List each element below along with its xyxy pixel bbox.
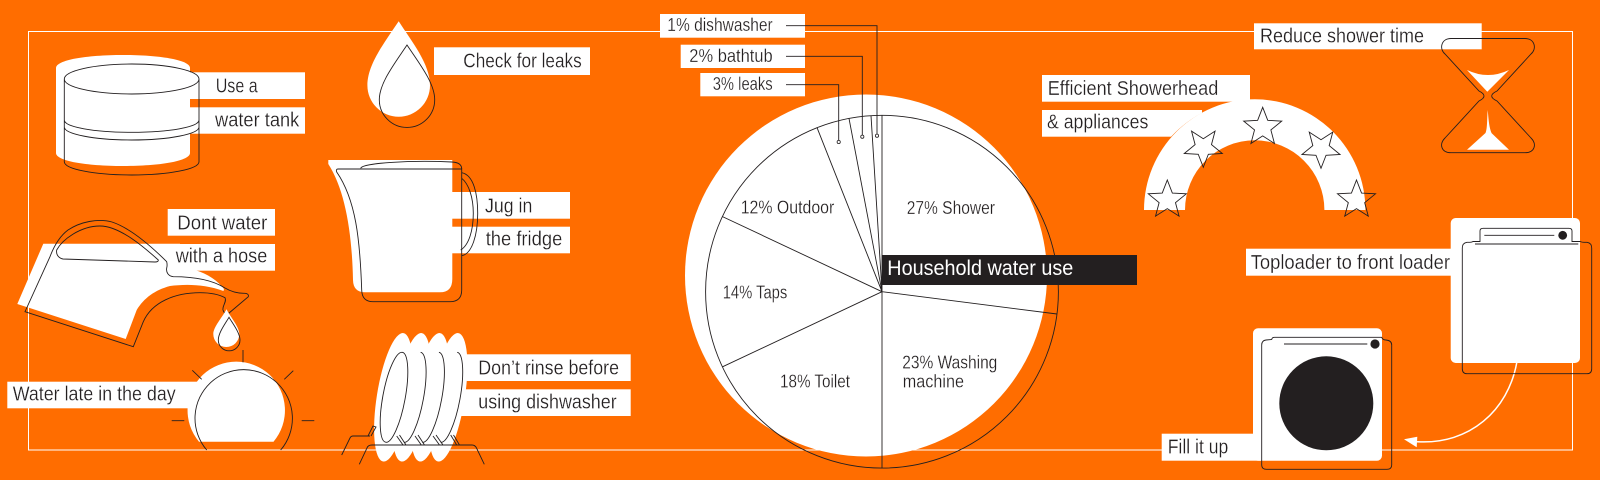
label: 27% shower: 27% Shower [907,198,995,218]
callout: 3% leaks [700,73,840,144]
label: use a: Use a [216,75,258,97]
title: household water use [882,255,1137,285]
callout: 3% leaks: 3% leaks [713,74,773,94]
label: 23% washing machine: machine [903,372,964,392]
label: appliances: & appliances [1047,111,1148,133]
icon: front-loading washer [1253,328,1392,469]
label: jug in: Jug in [485,195,532,217]
panel: check for leaks [367,21,590,127]
label: 12% outdoor: 12% Outdoor [741,197,834,217]
panel: jug in the fridge [328,160,570,302]
label: fill it up [1162,434,1262,461]
label: with a hose: with a hose [175,245,267,267]
pie outline and slices [706,115,1058,468]
label: water tank [190,107,305,134]
icon: plate outlines [375,350,468,444]
label: fill it up: Fill it up [1168,436,1228,458]
label: reduce shower time [1254,23,1482,49]
panel: water tank [56,55,305,175]
label: appliances [1042,110,1202,137]
panel: sun [7,350,314,450]
panel: fill it up [1162,328,1392,469]
panel: toploader to front loader [1246,218,1592,447]
icon: water tank [56,55,199,175]
callout: 1% dishwasher: 1% dishwasher [667,15,773,35]
icon: hourglass [1442,38,1534,153]
icon: five stars [1148,107,1376,216]
icon: water drop [367,21,435,127]
icon: sun [172,350,314,450]
label: 23% washing machine: 23% Washing [902,352,997,372]
label: dont water: Dont water [177,212,268,234]
label: efficient showerhead: Efficient Showerhead [1048,78,1218,100]
label: reduce shower time: Reduce shower time [1260,26,1424,48]
label: jug in [452,192,570,219]
panel: dishes [342,331,631,464]
panel: watering can [17,209,275,351]
icon: dish rack [342,426,484,464]
title: household water use: Household water use [887,257,1073,280]
callout: 2% bathtub: 2% bathtub [689,46,773,66]
icon: jug [328,160,478,302]
icon: small water drop [213,309,240,351]
label: 18% toilet: 18% Toilet [780,372,850,392]
label: toploader to front loader: Toploader to front loader [1251,252,1450,274]
label: the fridge [452,227,570,253]
pie chart: household water use [660,14,1137,468]
label: water late in the day: Water late in the day [13,384,176,406]
label: check for leaks [434,47,590,75]
icon: rainbow arch [1141,99,1368,210]
callout: 2% bathtub [681,45,864,138]
label: use a [190,72,305,99]
icon: watering can [17,220,248,347]
label: 14% taps: 14% Taps [723,282,787,302]
arrow: toploader to front loader [1404,363,1517,447]
icon: top-loading washer [1451,218,1592,374]
panel: reduce shower time [1254,23,1534,153]
panel: efficient showerhead [1042,75,1376,216]
callout: 1% dishwasher [660,14,879,137]
label: using dishwasher: using dishwasher [478,391,617,413]
icon: white plates [367,331,475,464]
label: don't rinse before: Don’t rinse before [478,357,619,379]
label: water tank: water tank [214,110,300,132]
label: check for leaks: Check for leaks [463,51,582,73]
label: 23% washing machine [902,352,997,392]
white pie backing [685,94,1047,456]
label: the fridge: the fridge [486,229,562,251]
